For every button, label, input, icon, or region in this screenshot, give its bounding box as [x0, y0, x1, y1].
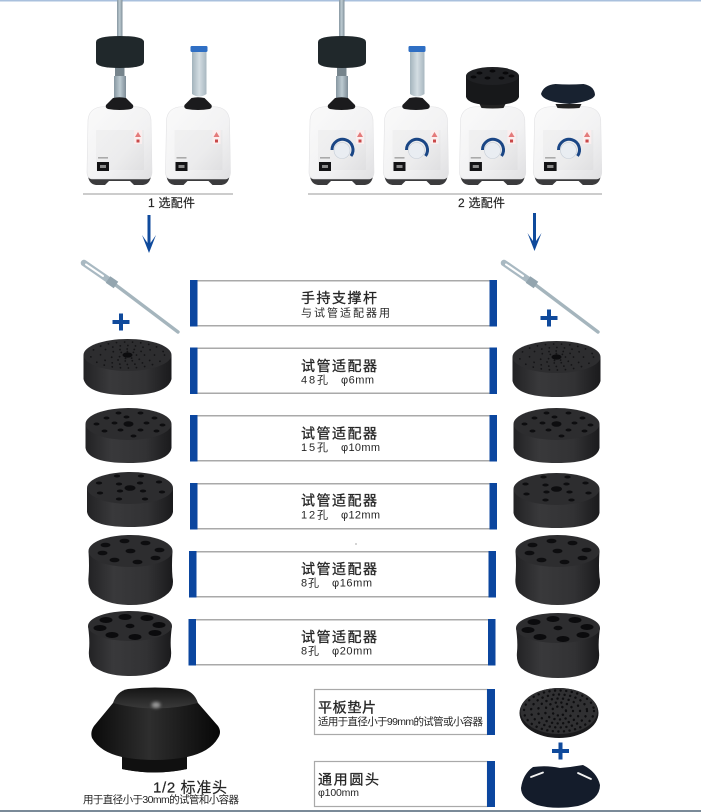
plus between pad and round head: [552, 742, 569, 760]
subtext: [301, 576, 372, 590]
right adapter 16mm: [515, 535, 600, 605]
right plus sign: [540, 310, 558, 326]
right adapter 15 holes: [514, 408, 600, 463]
bottom border line: [0, 810, 701, 812]
mixer: tube holder: [166, 46, 230, 185]
panel: adapter 8 holes 16mm: [189, 551, 496, 598]
subtext: [301, 508, 380, 522]
subtext: [301, 441, 380, 454]
right accessory: pipette handle: [504, 263, 598, 332]
flat pad image: [520, 688, 598, 738]
group 2 baseline: [308, 194, 602, 195]
subtext: φ10mm: [341, 442, 380, 454]
mixer with knob: round head on top: [534, 84, 602, 185]
panel: adapter 15 holes: [190, 415, 497, 462]
heading: 试管适配器: [301, 358, 377, 374]
subtext: φ20mm: [332, 646, 372, 658]
heading: 试管适配器: [301, 561, 377, 577]
subtext: φ16mm: [332, 578, 372, 590]
subtext: 与试管适配器用: [301, 306, 390, 320]
caption 2: 2 选配件: [458, 196, 505, 210]
left adapter 48 holes: [84, 339, 172, 395]
standard head 1/2: [91, 688, 220, 772]
panel: universal round head: [314, 761, 495, 807]
caption 1: 1 选配件: [148, 196, 195, 210]
standard head title: 1/2 标准头: [153, 780, 227, 796]
subtext: φ100mm: [318, 787, 359, 799]
subtext: 8孔: [301, 576, 319, 590]
universal round head image: [521, 765, 600, 808]
right adapter 12 holes: [514, 473, 600, 528]
left adapter 15 holes: [86, 408, 172, 463]
top border line: [0, 0, 701, 2]
subtext: [301, 644, 372, 658]
mixer: rod and sponge: [87, 0, 152, 185]
group 1 baseline: [83, 194, 233, 195]
left accessory: pipette handle: [84, 263, 178, 332]
heading: 平板垫片: [318, 700, 376, 716]
subtext: 适用于直径小于99mm的试管或小容器: [318, 715, 484, 728]
subtext: 48孔: [301, 374, 328, 386]
subtext: φ6mm: [341, 374, 374, 386]
panel: adapter 12 holes: [190, 483, 497, 530]
subtext: 8孔: [301, 644, 319, 658]
subtext: 15孔: [301, 441, 328, 454]
panel: flat pad: [314, 689, 495, 735]
heading: 手持支撑杆: [301, 290, 377, 306]
left adapter 20mm: [88, 611, 172, 676]
heading: 试管适配器: [301, 426, 377, 442]
subtext: [301, 374, 374, 386]
subtext: φ12mm: [341, 510, 380, 522]
mixer with knob: adapter on top: [460, 67, 526, 185]
standard head subtext: 用于直径小于30mm的试管和小容器: [83, 793, 240, 806]
arrow 1: [142, 215, 156, 253]
panel: handheld rod: [190, 280, 497, 326]
heading: 通用圆头: [318, 772, 379, 788]
panel: adapter 8 holes 20mm: [188, 619, 496, 666]
panel: adapter 48 holes: [190, 348, 497, 394]
mixer group 1: [83, 0, 233, 253]
heading: 试管适配器: [301, 492, 377, 508]
right adapter 20mm: [516, 613, 600, 678]
subtext: 12孔: [301, 508, 328, 522]
left adapter 12 holes: [87, 472, 173, 527]
left adapter 16mm: [88, 535, 173, 605]
right adapter 48 holes: [512, 341, 600, 397]
heading: 试管适配器: [301, 629, 377, 645]
mixer group 2: [308, 0, 602, 251]
arrow 2: [528, 213, 542, 251]
left plus sign: [112, 314, 130, 330]
mixer with knob: rod and sponge: [309, 0, 374, 185]
mixer with knob: tube holder: [384, 46, 448, 185]
